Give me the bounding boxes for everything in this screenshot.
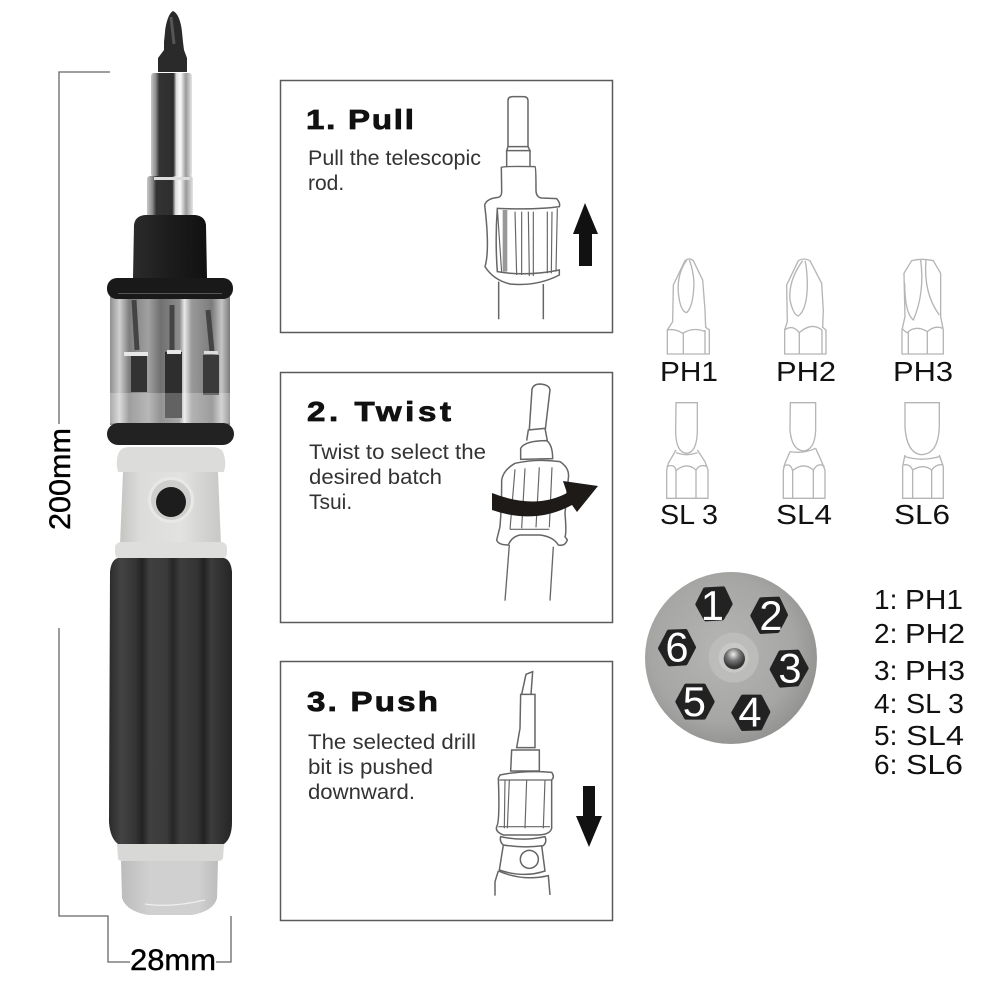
screwdriver photo xyxy=(107,11,234,915)
socket 6: 6 xyxy=(665,624,689,671)
end cap xyxy=(121,861,218,915)
label: SL 3: SL 3 xyxy=(660,499,718,530)
heading: 3. Push: 3. Push xyxy=(307,686,438,717)
legend: socket numbers: SL4 xyxy=(906,720,964,751)
socket 4 xyxy=(733,689,768,736)
socket 3: 3 xyxy=(778,645,802,692)
bit tip xyxy=(158,11,187,72)
instruction text: rod. xyxy=(308,172,344,195)
legend: socket numbers: 1: xyxy=(874,584,897,615)
bit: PH2 xyxy=(785,259,826,354)
side hole xyxy=(148,477,194,523)
arrow: up xyxy=(573,203,598,266)
clear barrel xyxy=(110,295,230,425)
legend: socket numbers xyxy=(874,584,965,780)
white ring xyxy=(115,542,227,559)
legend: socket numbers: 2: xyxy=(874,618,897,649)
label: 28mm: 28mm xyxy=(130,944,216,977)
instruction text: bit is pushed xyxy=(308,756,433,779)
panel: 2. Twist xyxy=(280,372,612,622)
instruction text: Tsui. xyxy=(309,491,352,514)
bit: PH1 xyxy=(667,259,709,354)
white neck xyxy=(117,447,225,472)
upper black flange xyxy=(107,278,233,299)
socket 1 xyxy=(697,582,731,629)
lower black ring xyxy=(107,423,234,445)
rubber grip xyxy=(109,558,232,844)
legend: socket numbers: 4: xyxy=(874,688,897,719)
arrow: down xyxy=(576,786,602,847)
instruction text: Pull the telescopic xyxy=(308,147,481,170)
label: SL4: SL4 xyxy=(776,499,832,530)
bit: SL6 xyxy=(903,403,943,498)
bit: SL4 xyxy=(783,403,825,498)
legend: socket numbers: PH2 xyxy=(905,618,965,649)
panel: 3. Push xyxy=(280,662,612,920)
socket 5: 5 xyxy=(683,678,706,725)
socket 6 xyxy=(660,624,694,671)
legend: socket numbers: PH1 xyxy=(905,584,963,615)
black collar xyxy=(133,215,207,278)
legend: socket numbers: 5: xyxy=(874,720,897,751)
socket 5 xyxy=(677,678,713,725)
label: PH2: PH2 xyxy=(776,356,836,387)
legend: socket numbers: 6: xyxy=(874,749,897,780)
dimension lines: height and width xyxy=(59,72,231,962)
illustration: push xyxy=(495,672,553,896)
panel: 1. Pull xyxy=(280,80,612,332)
illustration: twist xyxy=(497,384,569,601)
legend: socket numbers: 3: xyxy=(874,655,897,686)
arrow: twist xyxy=(492,481,598,516)
socket 3 xyxy=(772,645,807,692)
legend: socket numbers: PH3 xyxy=(905,655,965,686)
numbered bit wheel xyxy=(645,572,817,744)
bit diagrams xyxy=(660,259,953,530)
illustration: pull xyxy=(485,97,560,319)
legend: socket numbers: SL6 xyxy=(906,749,963,780)
heading: 2. Twist: 2. Twist xyxy=(307,396,451,427)
socket 2: 2 xyxy=(759,592,783,639)
socket 2 xyxy=(752,592,786,639)
socket 1: 1 xyxy=(701,582,724,629)
chrome shaft xyxy=(147,73,193,218)
lower white ring xyxy=(117,844,224,861)
instruction text: desired batch xyxy=(309,466,442,489)
heading: 1. Pull: 1. Pull xyxy=(306,104,414,135)
instruction text: The selected drill xyxy=(308,731,476,754)
bit: SL3 xyxy=(667,403,708,498)
label: PH1: PH1 xyxy=(660,356,718,387)
bit: PH3 xyxy=(902,259,943,354)
instruction text: Twist to select the xyxy=(309,441,486,464)
legend: socket numbers: SL 3 xyxy=(906,688,964,719)
socket 4: 4 xyxy=(738,689,762,736)
instruction text: downward. xyxy=(308,781,415,804)
label: SL6: SL6 xyxy=(894,499,950,530)
label: 200mm: 200mm xyxy=(44,428,77,530)
label: PH3: PH3 xyxy=(893,356,953,387)
